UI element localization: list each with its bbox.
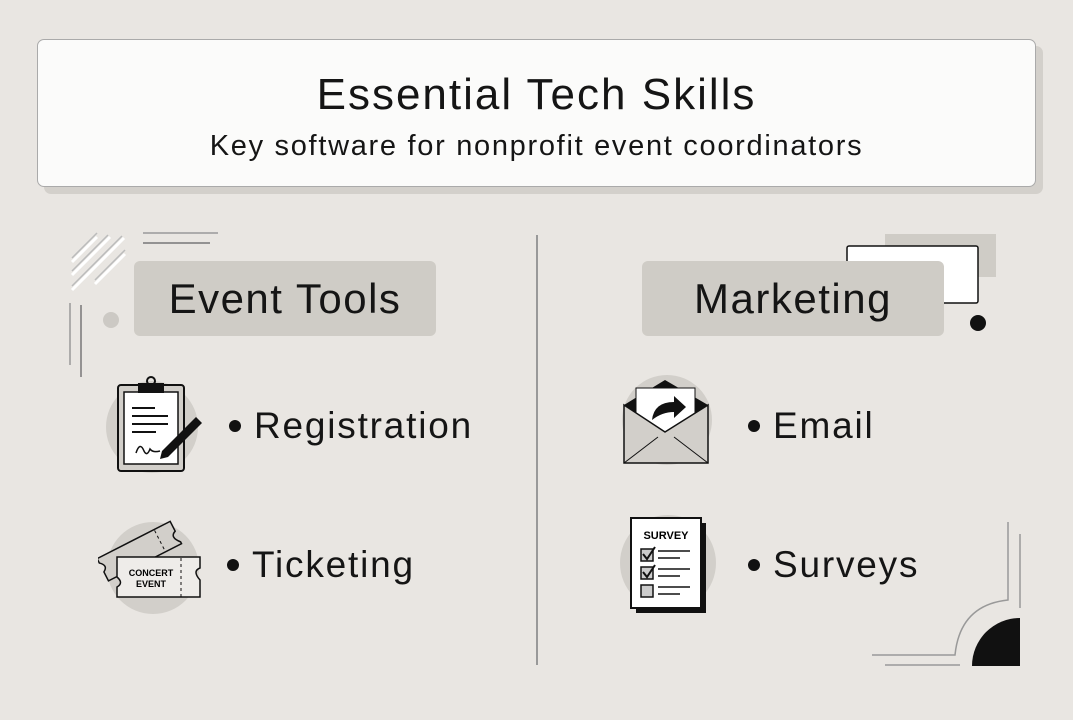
subtitle: Key software for nonprofit event coordinators <box>210 130 863 162</box>
icon: survey: SURVEY <box>643 530 689 542</box>
title box <box>37 39 1036 187</box>
divider <box>536 235 538 665</box>
heading: Marketing <box>642 261 944 336</box>
decoration bottom right <box>872 522 1021 666</box>
heading: Event Tools: Event Tools <box>169 275 401 322</box>
icon: tickets <box>98 520 201 614</box>
item: Email: Email <box>773 405 875 446</box>
icon: tickets: CONCERT <box>129 568 174 578</box>
item: Registration: Registration <box>254 405 473 446</box>
heading: Marketing: Marketing <box>694 275 892 322</box>
decoration left <box>69 232 218 377</box>
icon: tickets: EVENT <box>136 579 167 589</box>
title: Essential Tech Skills <box>317 70 756 119</box>
decoration marketing <box>846 234 996 331</box>
icon: envelope <box>622 375 712 465</box>
item: Ticketing: Ticketing <box>252 544 415 585</box>
icon: clipboard <box>106 376 202 473</box>
item: Surveys: Surveys <box>773 544 919 585</box>
heading: Event Tools <box>134 261 436 336</box>
icon: survey <box>620 515 716 613</box>
